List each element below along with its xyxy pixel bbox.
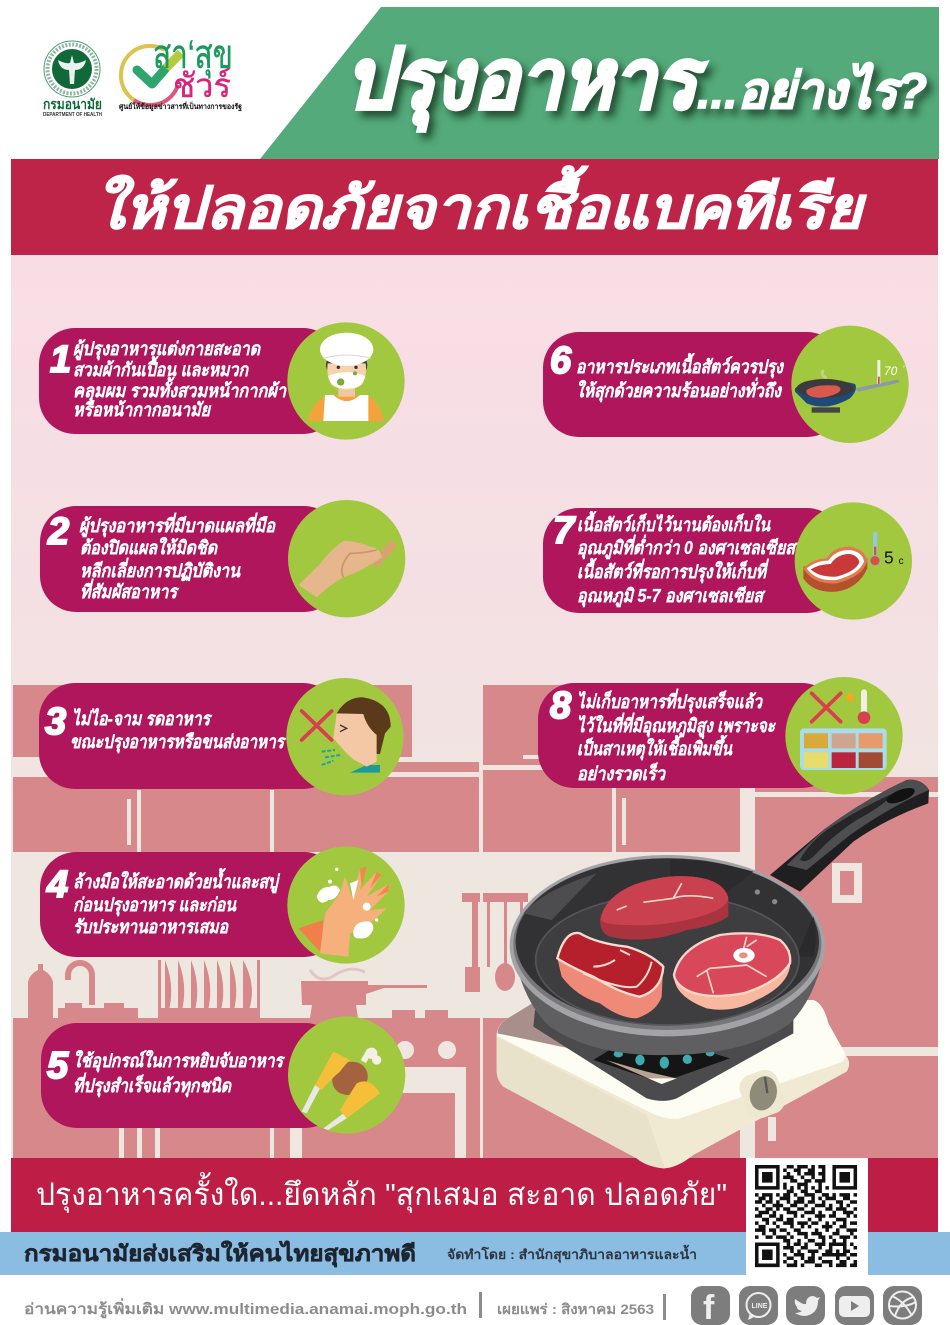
card 4 text — [73, 868, 281, 937]
card 6 icon: pan with thermometer — [791, 326, 909, 443]
slogan: ปรุงอาหารครั้งใด...ยึดหลัก "สุกเสมอ สะอาด ปลอดภัย" — [36, 1172, 727, 1214]
card 4 text: รับประทานอาหารเสมอ — [73, 916, 230, 937]
steak right — [674, 933, 790, 1010]
card 1 text — [73, 338, 287, 420]
footer motto: กรมอนามัยส่งเสริมให้คนไทยสุขภาพดี — [24, 1240, 416, 1268]
frying pan on gas stove illustration — [497, 780, 929, 1168]
card 4 text: ก่อนปรุงอาหาร และก่อน — [73, 894, 237, 917]
card 6 text: อาหารประเภทเนื้อสัตว์ควรปรุง — [576, 353, 785, 379]
card 4 — [40, 846, 405, 964]
card 6 pill — [543, 332, 843, 437]
card 6 icon: pan with thermometer: ° — [903, 366, 906, 372]
card 1 icon: cook with mask — [287, 322, 405, 440]
QR code — [746, 1158, 868, 1277]
card 2 icon: bandaged hand — [288, 500, 405, 617]
card 3 icon: coughing person — [286, 678, 404, 795]
card 7 — [543, 502, 912, 620]
card 1 number: 1 — [50, 339, 71, 381]
logo: health sure — [119, 33, 242, 112]
card 8 icon: food boxes and heat warning — [785, 677, 903, 794]
card 3 text: ขณะปรุงอาหารหรือขนส่งอาหาร — [70, 731, 287, 754]
card 2 number: 2 — [47, 511, 69, 553]
steak top — [600, 876, 728, 940]
pan handle — [770, 780, 929, 892]
card 4 number: 4 — [46, 864, 68, 906]
card 1 — [39, 322, 405, 440]
card 1 text: ผู้ปรุงอาหารแต่งกายสะอาด — [73, 338, 261, 361]
green title band — [260, 7, 939, 159]
card 8 number: 8 — [550, 685, 572, 727]
card 6 — [543, 326, 909, 443]
card 7 pill — [543, 508, 843, 613]
card 3 pill — [39, 683, 339, 789]
red slogan band — [11, 1158, 938, 1232]
card 7 text: เนื้อสัตว์เก็บไว้นานต้องเก็บใน — [577, 511, 771, 535]
title — [345, 32, 927, 132]
card 8 — [538, 677, 903, 794]
card 8 text: อย่างรวดเร็ว — [577, 762, 666, 784]
card 8 text — [577, 688, 776, 784]
card 7 icon: meat with thermometer: 5 — [884, 547, 894, 567]
card 2 text — [79, 512, 277, 602]
card 7 icon: meat with thermometer — [795, 502, 912, 620]
stove grate and flames — [533, 1010, 793, 1101]
twitter icon — [786, 1286, 825, 1325]
card 8 pill — [538, 683, 838, 788]
logo: health sure: สา‘สุข — [153, 33, 233, 79]
card 6 icon: pan with thermometer: 70 — [884, 364, 898, 378]
card 5 number: 5 — [47, 1045, 69, 1087]
title: ...อย่างไร? — [697, 62, 927, 119]
organiser credit: จัดทำโดย : สำนักสุขาภิบาลอาหารและน้ำ — [447, 1244, 697, 1263]
logo: health sure: ศูนย์ให้ข้อมูลข่าวสารที่เป็นทางการของรัฐ — [119, 100, 242, 112]
line icon: LINE — [752, 1303, 768, 1310]
card 3 — [39, 678, 404, 795]
card 4 icon: washing hands — [287, 846, 405, 964]
card 5 icon: tongs holding chicken — [288, 1016, 405, 1134]
card 5 — [41, 1016, 405, 1134]
publish date: เผยแพร่ : สิงหาคม 2563 — [497, 1301, 654, 1317]
pink panel background — [11, 255, 938, 1158]
steak left — [557, 933, 663, 1018]
card 3 number: 3 — [45, 701, 66, 743]
kitchen background illustration — [13, 685, 938, 1158]
card 7 text: เนื้อสัตว์ที่รอการปรุงให้เก็บที่ — [577, 558, 769, 584]
card 7 number: 7 — [553, 510, 576, 552]
card 6 text: ให้สุกด้วยความร้อนอย่างทั่วถึง — [576, 377, 783, 403]
card 1 text: หรือหน้ากากอนามัย — [73, 399, 212, 420]
read more line: อ่านความรู้เพิ่มเติม www.multimedia.anamai.moph.go.th — [24, 1298, 467, 1319]
kitchen details: pale lines and oven — [119, 755, 862, 1158]
card 8 text: เป็นสาเหตุให้เชื้อเพิ่มขึ้น — [577, 735, 733, 761]
card 5 text: ใช้อุปกรณ์ในการหยิบจับอาหาร — [73, 1050, 286, 1073]
card 6 text — [576, 353, 785, 403]
card 4 text: ล้างมือให้สะอาดด้วยน้ำและสบู่ — [73, 868, 281, 894]
card 7 icon: meat with thermometer: c — [899, 556, 904, 567]
subtitle: ให้ปลอดภัยจากเชื้อแบคทีเรีย — [94, 165, 867, 241]
card 2 pill — [40, 506, 340, 612]
pan body — [510, 855, 825, 1055]
card 2 text: หลีกเลี่ยงการปฏิบัติงาน — [80, 557, 241, 582]
card 8 text: ไว้ในที่ที่มีอุณหภูมิสูง เพราะจะ — [577, 712, 776, 738]
logo: department of health: DEPARTMENT OF HEALTH — [43, 112, 102, 118]
card 2 text: ผู้ปรุงอาหารที่มีบาดแผลที่มือ — [79, 512, 277, 538]
logo: department of health — [43, 41, 102, 118]
logo: health sure: ชัวร์ — [173, 67, 231, 104]
card 3 text: ไม่ไอ-จาม รดอาหาร — [72, 708, 213, 729]
dribbble icon — [883, 1286, 922, 1325]
card 2 — [40, 500, 405, 617]
card 2 text: ที่สัมผัสอาหาร — [80, 578, 180, 602]
card 1 pill — [39, 328, 339, 434]
card 8 text: ไม่เก็บอาหารที่ปรุงเสร็จแล้ว — [577, 688, 763, 714]
card 7 text: อุณหภูมิ 5-7 องศาเซลเซียส — [577, 585, 766, 608]
blue footer band — [0, 1232, 950, 1275]
social icons — [691, 1286, 922, 1325]
card 2 text: ต้องปิดแผลให้มิดชิด — [80, 537, 218, 558]
card 5 text — [73, 1050, 286, 1098]
stove body — [497, 1000, 849, 1168]
card 1 text: คลุมผม รวมทั้งสวมหน้ากากผ้า — [73, 377, 287, 403]
card 5 pill — [41, 1023, 341, 1128]
card 1 text: สวมผ้ากันเปื้อน และหมวก — [73, 356, 250, 380]
title: ปรุงอาหาร — [345, 32, 708, 132]
card 5 text: ที่ปรุงสำเร็จแล้วทุกชนิด — [73, 1072, 232, 1098]
card 6 number: 6 — [550, 340, 572, 382]
line icon — [739, 1286, 778, 1325]
card 3 text — [70, 708, 287, 754]
card 7 text — [577, 511, 798, 608]
logo: department of health: กรมอนามัย — [43, 96, 102, 112]
card 7 text: อุณภูมิที่ต่ำกว่า 0 องศาเซลเซียส — [577, 534, 798, 560]
facebook icon — [691, 1286, 730, 1325]
red subtitle banner — [11, 159, 938, 255]
youtube icon — [835, 1286, 874, 1325]
card 4 pill — [40, 852, 340, 957]
